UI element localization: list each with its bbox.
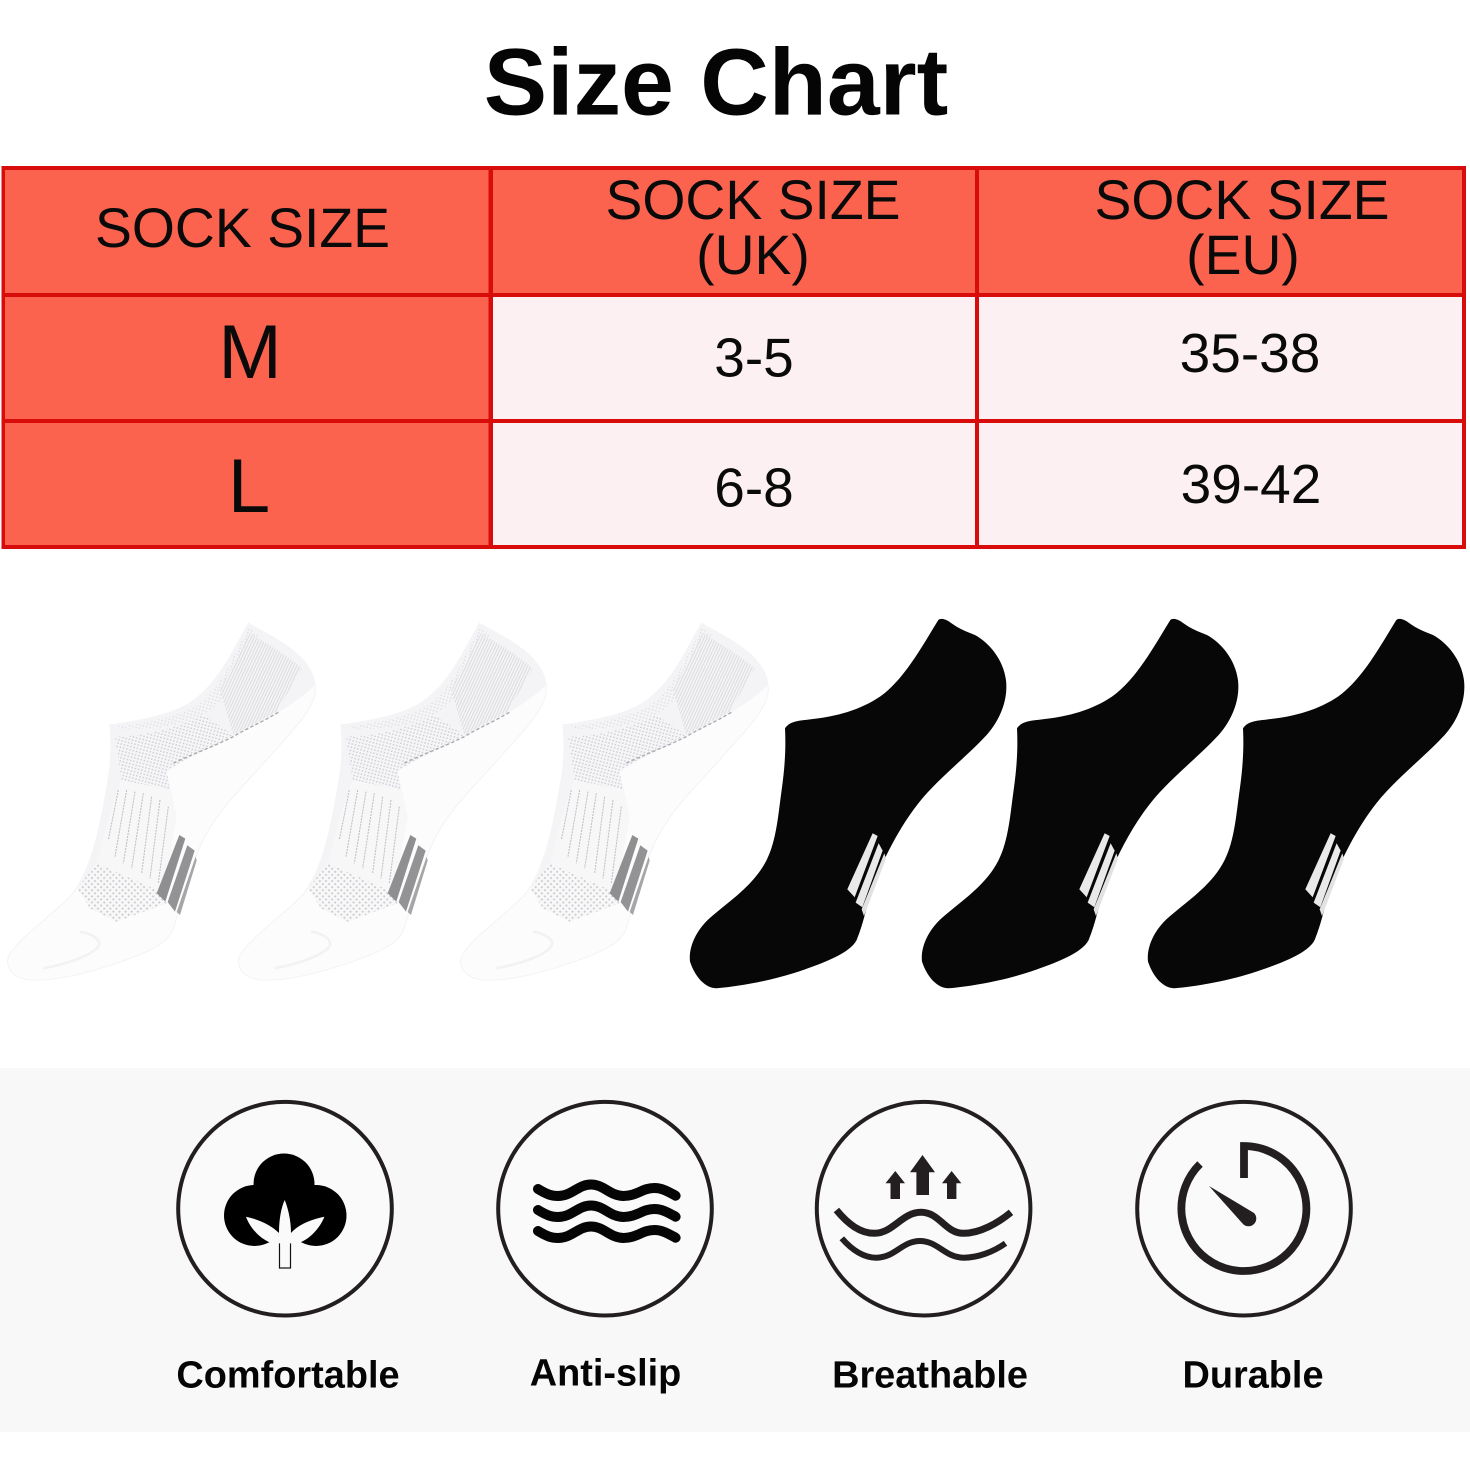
icon: durable gauge <box>1137 1102 1351 1315</box>
row label M: M <box>218 310 282 395</box>
M UK size: 3-5 <box>714 326 794 388</box>
L EU size: 39-42 <box>1181 453 1321 515</box>
M EU size: 35-38 <box>1180 322 1320 384</box>
icon: anti-slip waves <box>498 1102 712 1315</box>
features band <box>0 1068 1470 1432</box>
header: sock size EU: SOCK SIZE <box>1095 169 1389 231</box>
label: anti-slip: Anti-slip <box>530 1352 681 1394</box>
label: durable: Durable <box>1182 1354 1324 1396</box>
row label L: L <box>228 444 270 529</box>
header row and size column background <box>3 168 1464 547</box>
white sock 2 <box>239 623 546 980</box>
white sock 3 <box>461 623 768 980</box>
header: sock size: SOCK SIZE <box>95 197 390 259</box>
icon: breathable <box>817 1102 1030 1315</box>
white sock 1 <box>8 623 315 980</box>
value cells background <box>490 295 1464 547</box>
header: sock size UK: (UK) <box>696 224 810 286</box>
size table <box>2 166 1466 549</box>
black sock 1 <box>690 619 1006 988</box>
header: sock size UK: SOCK SIZE <box>606 169 900 231</box>
title: Size Chart <box>484 30 948 136</box>
black sock 2 <box>922 619 1238 988</box>
black sock 3 <box>1148 619 1464 988</box>
header: sock size EU: (EU) <box>1186 224 1300 286</box>
L UK size: 6-8 <box>714 456 794 518</box>
icon: cotton <box>178 1102 392 1315</box>
label: comfortable: Comfortable <box>176 1354 400 1396</box>
label: breathable: Breathable <box>832 1354 1028 1396</box>
